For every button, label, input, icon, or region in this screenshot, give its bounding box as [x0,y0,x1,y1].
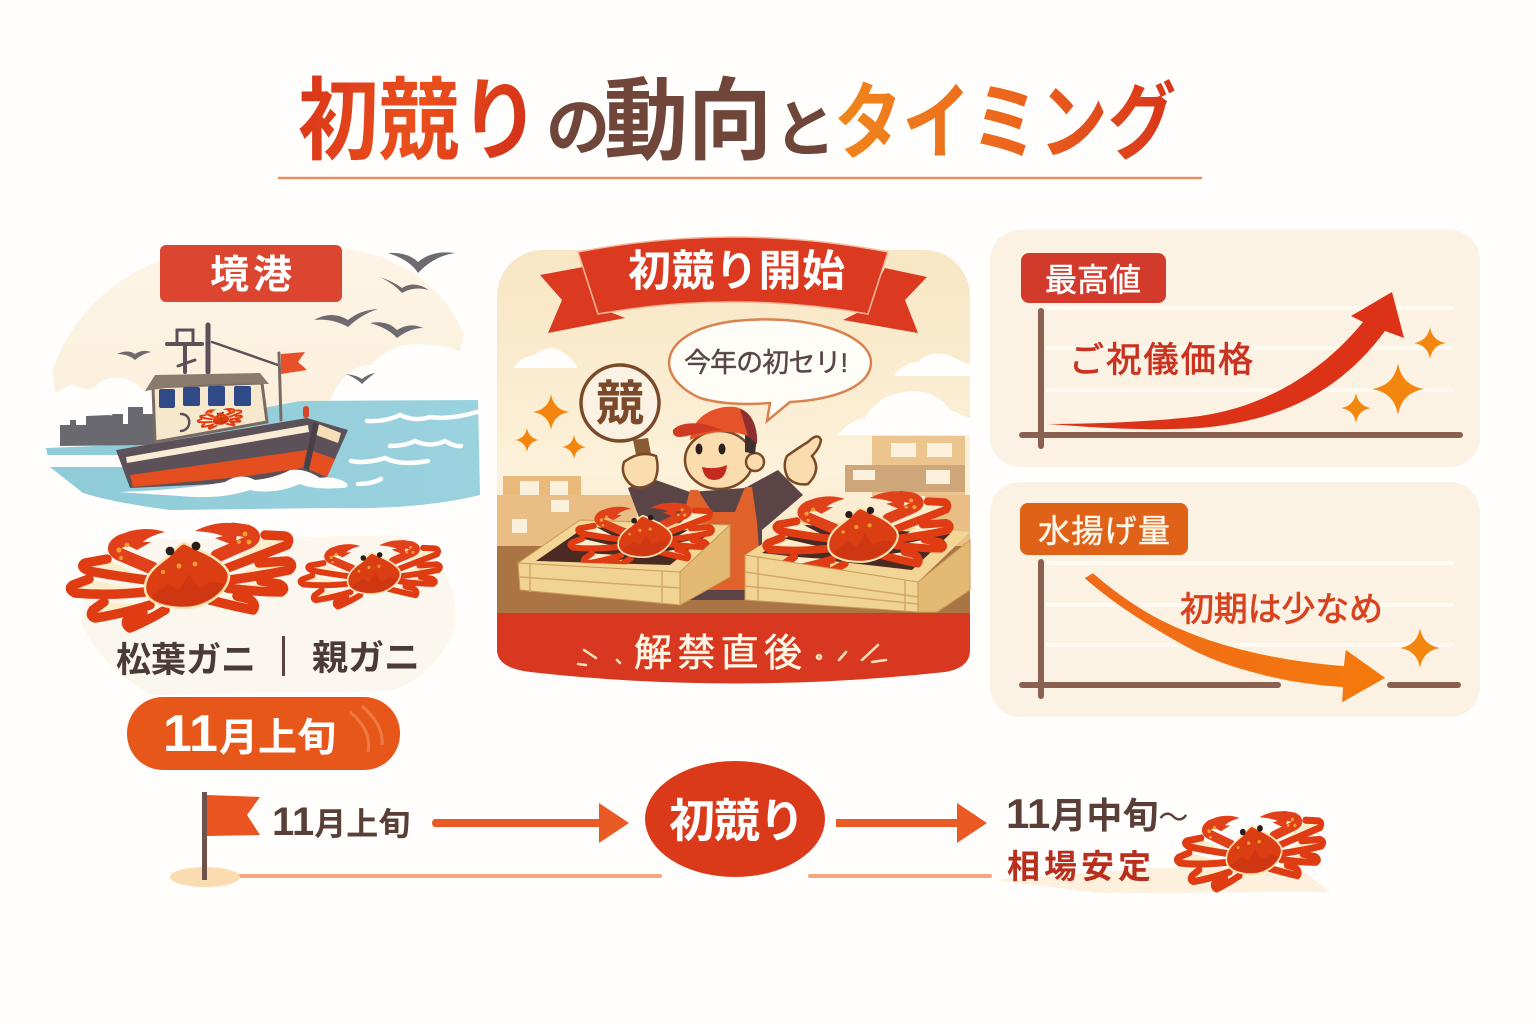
red footer band [497,613,970,684]
clouds [513,348,970,435]
early small text: 初期は少なめ [1180,591,1383,629]
flag [281,352,307,374]
date pill [127,697,400,770]
title: 動向 [604,72,772,172]
axes [1022,311,1460,446]
axes [1022,562,1458,696]
bow wave [118,470,348,497]
waves [351,412,477,484]
sky wash [52,248,464,440]
stable price: 相場安定 [1007,848,1151,885]
label: highest price: 最高値 [1045,262,1141,298]
mid november: 11月中旬〜 [1006,790,1188,837]
clouds [50,344,482,470]
arrow 1 [432,803,629,843]
celebration price text: ご祝儀価格 [1069,341,1253,380]
title: の [546,92,610,164]
arrow 2 [836,803,987,843]
crab [1177,811,1323,889]
port label: 境港 [210,254,296,297]
speech bubble: 今年の初セリ! [684,348,848,378]
red footer band: 解禁直後 [634,633,802,675]
flag marker [170,792,260,887]
panel: highest price chart [990,230,1480,467]
smear behind stable price [995,868,1330,893]
crab names [116,636,420,680]
crab names: 松葉ガニ [116,641,256,680]
title underline [278,177,1202,179]
paddle [581,365,659,474]
sparkles [1341,327,1446,423]
title: 初競り [298,72,540,172]
panel background [497,250,970,660]
birds [117,252,455,384]
crab: oyagani [301,540,440,606]
speech bubble [669,319,871,421]
first auction oval: 初競り [669,795,805,847]
panel: landing volume chart [990,482,1480,717]
buildings [497,436,970,551]
rising arrow [1048,292,1404,429]
title [298,72,1176,172]
blob background [82,535,455,695]
ribbon banner [540,237,927,333]
auctioneer [581,365,821,600]
left hand [623,454,658,488]
hull [116,418,348,488]
left crate with crab [518,503,730,605]
sparkle [1400,628,1440,668]
mast [167,325,281,420]
crab names: 親ガニ [312,639,420,678]
panel: port scene [40,245,482,510]
start date: 11月上旬 [272,800,410,844]
ground [497,546,970,614]
label: landing volume: 水揚げ量 [1038,513,1170,549]
label: highest price [1021,253,1166,303]
crab: matsuba [70,523,292,628]
sea [46,400,480,510]
sparkles [515,394,586,459]
head [685,431,753,489]
date pill: 11月上旬 [163,705,336,763]
panel: crab varieties [70,523,455,770]
boat [116,325,348,497]
first auction oval [645,761,825,877]
ribbon banner: 初競り開始 [628,248,845,296]
timeline base lines [236,874,990,878]
paddle: 競 [596,378,644,431]
right crate with crab [745,491,970,612]
label: landing volume [1020,503,1188,555]
port label [160,245,342,302]
title: と [774,96,836,165]
body [628,470,803,600]
title: タイミング [834,76,1176,170]
right hand [785,436,821,484]
falling arrow [1083,572,1387,704]
timeline [170,761,1330,893]
skyline [60,407,155,446]
cabin [153,383,267,442]
panel: auction start [497,237,970,684]
